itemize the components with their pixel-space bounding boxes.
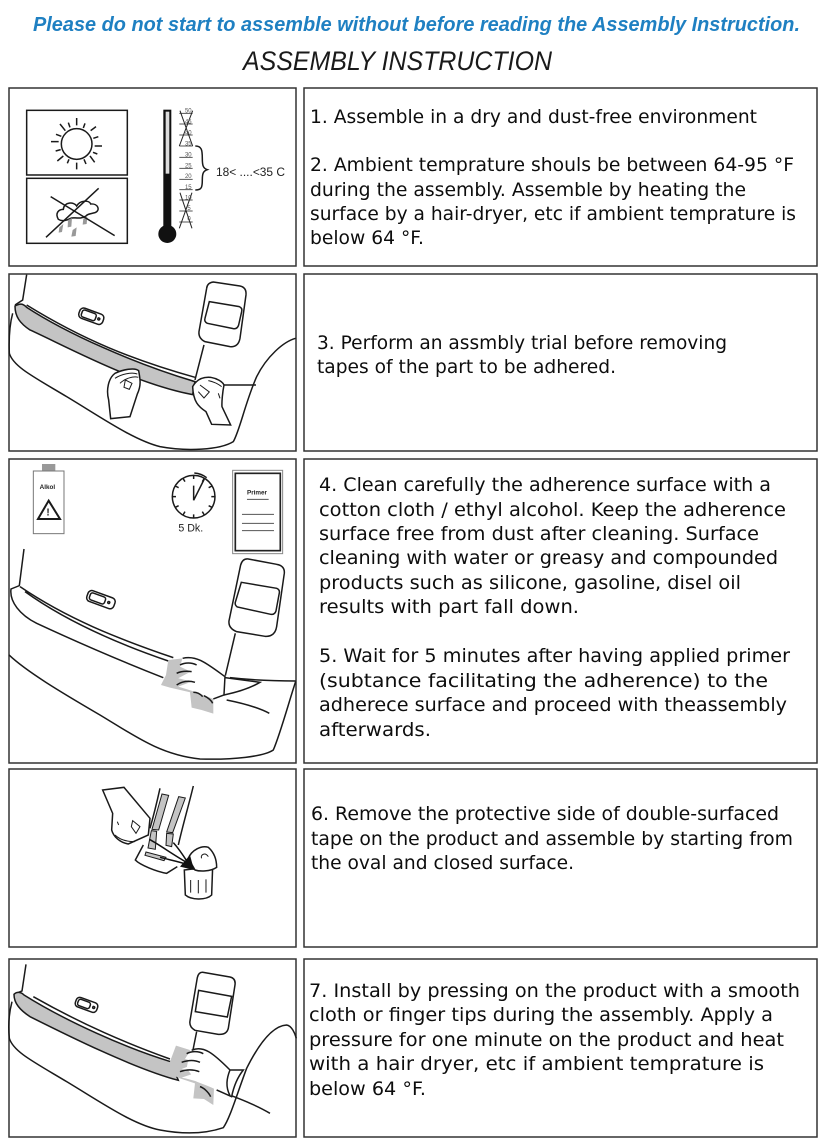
panel: cleaning illustration xyxy=(9,459,296,763)
icon: thermometer: 5 xyxy=(187,206,191,212)
panel: step 7 text: pressure for one minute on the product and heat xyxy=(309,1029,784,1051)
door handle xyxy=(78,307,105,326)
panel: step 7 text xyxy=(304,959,817,1137)
icon: thermometer: 20 xyxy=(185,174,192,180)
hand with cloth xyxy=(161,657,269,714)
icon: clock xyxy=(172,473,215,534)
icon: alcohol bottle: ! xyxy=(46,508,50,519)
panel: step 6 text: 6. Remove the protective side of double-surfaced xyxy=(311,803,779,825)
car body outline xyxy=(9,275,296,449)
panel: steps 4 and 5 text: 4. Clean carefully the adherence surface with a xyxy=(319,474,771,496)
warning banner: Please do not start to assemble without before reading the Assembly Instruction. xyxy=(33,13,800,36)
icon: sun xyxy=(27,110,127,175)
grey trim strip xyxy=(14,992,178,1080)
panel: steps 4 and 5 text: adherece surface and proceed with theassembly xyxy=(319,694,787,716)
panel: steps 4 and 5 text: cleaning with water or greasy and compounded xyxy=(319,547,778,569)
panel: step 1 and 2 text: 1. Assemble in a dry and dust-free environment xyxy=(310,106,757,128)
panel: step 1 and 2 text: surface by a hair-dryer, etc if ambient temprature is xyxy=(310,203,796,225)
panel: steps 4 and 5 text: results with part fall down. xyxy=(319,596,579,618)
panel: step 7 text: with a hair dryer, etc if ambient temprature is xyxy=(309,1053,764,1075)
icon: thermometer: 30 xyxy=(185,152,192,158)
panel: step 7 text: cloth or finger tips during the assembly. Apply a xyxy=(309,1004,773,1026)
icon: thermometer xyxy=(158,109,207,243)
panel: step 3 text: 3. Perform an assmbly trial before removing xyxy=(317,332,727,354)
panel: steps 4 and 5 text xyxy=(304,459,817,763)
panel: steps 4 and 5 text: (subtance facilitating the adherence) to the xyxy=(319,670,768,692)
hand xyxy=(103,787,150,844)
car body outline xyxy=(9,549,296,759)
bracket part xyxy=(135,786,193,873)
hand with cloth xyxy=(165,1046,243,1105)
icon: thermometer: 0 xyxy=(187,217,191,223)
panel: step 7 text: 7. Install by pressing on the product with a smooth xyxy=(309,980,800,1002)
panel: step 1 and 2 text: during the assembly. Assemble by heating the xyxy=(310,179,746,201)
door handle xyxy=(74,996,99,1013)
icon: alcohol bottle xyxy=(33,464,64,534)
arrows into bin xyxy=(149,839,189,865)
icon: thermometer: 50 xyxy=(185,109,192,115)
panel: step 6 text xyxy=(304,769,817,947)
panel: step 6 text: tape on the product and assemble by starting from xyxy=(311,828,793,850)
door handle xyxy=(86,589,116,610)
tail lamp xyxy=(190,972,235,1034)
panel: step 1 and 2 text: 2. Ambient temprature shouls be between 64-95 °F xyxy=(310,154,794,176)
right hand xyxy=(193,377,231,425)
panel: step 3 text xyxy=(304,274,817,451)
panel: steps 4 and 5 text: products such as silicone, gasoline, disel oil xyxy=(319,572,741,594)
panel: step 3 text: tapes of the part to be adhered. xyxy=(317,356,616,378)
panel: steps 4 and 5 text: cotton cloth / ethyl alcohol. Keep the adherence xyxy=(319,499,786,521)
panel: pressing illustration xyxy=(9,959,296,1137)
title: ASSEMBLY INSTRUCTION xyxy=(241,46,552,76)
icon: thermometer: 45 xyxy=(185,120,192,126)
waste bin xyxy=(184,867,213,899)
temperature range label: 18< ....<35 C xyxy=(216,165,285,179)
icon: alcohol bottle: Alkol xyxy=(40,484,55,491)
left hand xyxy=(108,369,140,419)
panel: step 6 text: the oval and closed surface. xyxy=(311,852,574,874)
sleeve xyxy=(224,678,269,713)
icon: thermometer: 15 xyxy=(185,185,192,191)
panel: tape removal illustration xyxy=(9,769,296,947)
panel: steps 4 and 5 text: afterwards. xyxy=(319,719,431,741)
panel: environment illustration xyxy=(9,88,296,266)
panel: steps 4 and 5 text: surface free from dust after cleaning. Surface xyxy=(319,523,759,545)
icon: crossed-out rain xyxy=(27,178,127,243)
panel: step 7 text: below 64 °F. xyxy=(309,1078,426,1100)
primer sheet: Primer xyxy=(247,489,268,496)
panel: trial fit illustration xyxy=(9,274,296,451)
icon: clock: 5 Dk. xyxy=(178,522,203,534)
car body outline xyxy=(9,964,296,1133)
icon: thermometer: 10 xyxy=(185,195,192,201)
primer sheet xyxy=(233,470,283,554)
panel: steps 4 and 5 text: 5. Wait for 5 minutes after having applied primer xyxy=(319,645,790,667)
tail lamp xyxy=(199,282,246,347)
icon: thermometer: 40 xyxy=(185,131,192,137)
icon: thermometer: 25 xyxy=(185,163,192,169)
grey trim strip xyxy=(15,304,195,395)
panel: step 1 and 2 text xyxy=(304,88,817,266)
tail lamp xyxy=(229,559,284,636)
panel: step 1 and 2 text: below 64 °F. xyxy=(310,227,424,249)
icon: thermometer: 35 xyxy=(185,142,192,148)
